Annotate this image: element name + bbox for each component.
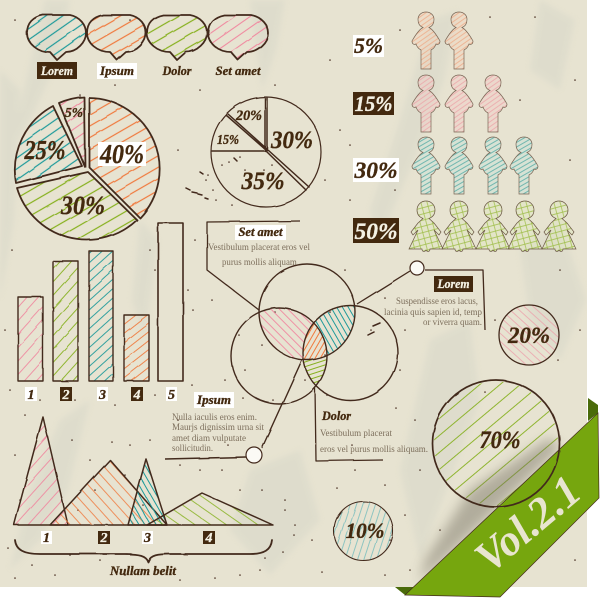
callout: Dolor: eros vel purus mollis aliquam. — [320, 445, 428, 455]
bubble: pink — [208, 15, 268, 60]
peak label 3: 3 — [143, 531, 151, 546]
bar label 3: 3 — [98, 388, 106, 403]
row: 15% — [353, 75, 507, 132]
slice: 5% — [59, 97, 85, 167]
peak label 4: 4 — [204, 531, 212, 546]
bar 2 — [53, 261, 78, 381]
callout: Ipsum: Maurjs dignissim urna sit — [172, 423, 264, 433]
row: 30% — [353, 137, 538, 194]
circle: 70% outline and value: 70% — [480, 427, 520, 454]
callout: Lorem — [357, 261, 485, 330]
bar label 2: 2 — [62, 388, 70, 403]
value: 40%: 40% — [99, 139, 144, 169]
bubble: teal — [27, 15, 86, 60]
callout: Set amet: Vestibulum placerat eros vel — [208, 243, 310, 253]
callout: Dolor: Vestibulum placerat — [320, 429, 392, 439]
value: 30%: 30% — [270, 127, 313, 154]
bubble: orange — [87, 15, 146, 60]
callout: Set amet: purus mollis aliquam. — [222, 258, 299, 268]
ribbon band — [405, 413, 599, 597]
label: Ipsum: Ipsum — [99, 63, 134, 78]
ribbon bottom fold — [395, 587, 417, 595]
peak label 1: 1 — [43, 531, 50, 546]
peak 3 — [128, 459, 167, 525]
value: 30%: 30% — [60, 191, 105, 220]
ribbon text: Vol.2.1 — [465, 466, 590, 582]
callout: Set amet: Set amet — [238, 225, 283, 239]
ribbon top fold — [588, 398, 598, 421]
peak 1 — [14, 417, 68, 525]
label: Set amet: Set amet — [216, 63, 261, 78]
value: 20%: 20% — [235, 108, 262, 124]
row: 50% — [353, 201, 576, 251]
bar label 5: 5 — [168, 388, 175, 403]
peak label 4 — [203, 531, 215, 546]
hatch: set amet overlap — [260, 308, 312, 358]
ribbon shadow — [420, 438, 560, 582]
circle: 20%: 20% — [507, 323, 550, 348]
peak label 2 — [98, 531, 110, 546]
bubble: green — [147, 15, 207, 60]
large pie chart — [15, 97, 160, 240]
hatch: dolor overlap — [304, 359, 326, 383]
value: 15%: 15% — [217, 133, 239, 148]
callout: Ipsum — [165, 360, 302, 463]
value: 35%: 35% — [241, 168, 284, 195]
brace — [15, 540, 272, 562]
bar label 1: 1 — [28, 388, 34, 403]
speech bubbles legend — [27, 15, 268, 79]
slice: 30% — [17, 172, 137, 240]
row: 5% — [353, 12, 473, 69]
label: Lorem: Lorem — [40, 63, 73, 78]
hatch: lorem overlap — [316, 306, 354, 354]
peak 2 — [50, 460, 167, 525]
label: Dolor: Dolor — [162, 63, 192, 78]
row: 30%: 30% — [353, 158, 398, 183]
callout: Lorem: lacinia quis sapien id, temp — [384, 308, 482, 318]
callout: Lorem: Lorem — [437, 277, 470, 291]
hatch: centre overlap — [304, 324, 326, 359]
venn circles — [231, 264, 398, 404]
callout: Ipsum: Ipsum — [196, 393, 231, 407]
callout: Ipsum: Nulla iaculis eros enim. — [172, 413, 257, 423]
peak label 3 — [142, 531, 153, 546]
mountain chart — [14, 417, 273, 578]
circle: 70% outline and value — [432, 380, 560, 507]
row: 50%: 50% — [354, 219, 398, 244]
peak label 1 — [41, 531, 52, 546]
callout: Ipsum: amet diam vulputate — [172, 434, 246, 444]
pie outline and dividers — [211, 97, 321, 207]
ribbon: Vol.2.1 — [395, 398, 599, 597]
bar 4 — [124, 315, 149, 381]
callout: Ipsum: sollicitudin. — [172, 444, 213, 454]
slice: 25% — [15, 106, 82, 183]
venn diagram — [230, 263, 399, 405]
small pie chart — [211, 97, 321, 207]
bar label 3 — [97, 387, 108, 403]
bar label 4: 4 — [132, 388, 140, 403]
slice: 40% — [89, 98, 160, 218]
row: 5%: 5% — [354, 33, 383, 58]
value: 25%: 25% — [24, 135, 66, 165]
bar 1 — [18, 297, 43, 381]
bar 3 — [89, 251, 113, 381]
caption: Nullam belit: Nullam belit — [109, 563, 176, 578]
callout: Dolor: Dolor — [321, 408, 352, 423]
callout: Lorem: Suspendisse eros lacus, — [396, 297, 478, 307]
pictogram chart — [353, 12, 576, 251]
callout: Dolor — [315, 388, 428, 461]
peak 4 — [147, 493, 273, 525]
callout: Set amet — [207, 221, 310, 310]
circle: 10%: 10% — [346, 518, 384, 543]
circle: 70% hatch — [434, 382, 558, 506]
row: 15%: 15% — [354, 91, 392, 116]
bar 5 — [158, 223, 183, 381]
bar label 2 — [60, 387, 72, 403]
bar label 1 — [25, 387, 37, 403]
circle: 10% — [334, 502, 393, 560]
bar label 4 — [131, 387, 143, 403]
circle: 20% — [499, 305, 559, 365]
peak label 2: 2 — [100, 531, 108, 546]
bar label 5 — [166, 387, 177, 403]
bar chart — [18, 223, 183, 403]
value: 5%: 5% — [65, 106, 83, 121]
callout: Lorem: or viverra quam. — [423, 318, 482, 328]
